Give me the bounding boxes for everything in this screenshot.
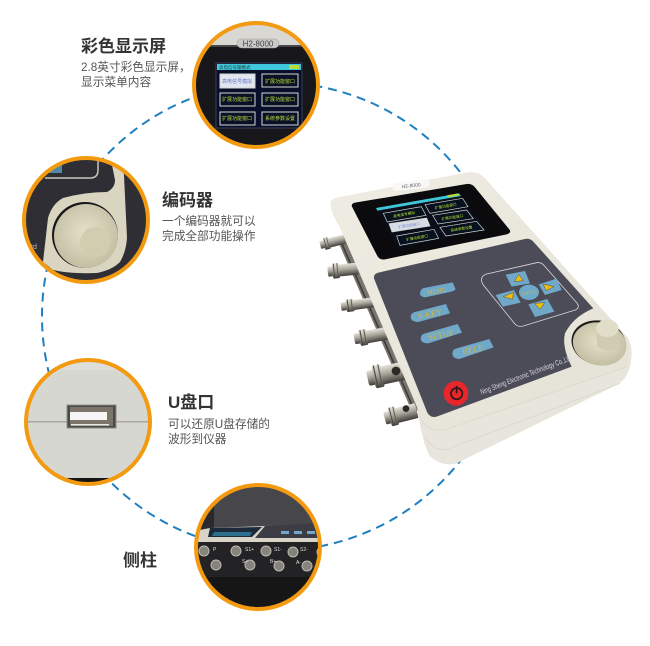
- rotary knob: [567, 315, 630, 370]
- brand text: Ning Sheng Electronic Technology Co.,Ltd: [479, 353, 572, 396]
- heading: USB port: U盘口: [168, 393, 214, 412]
- text: encoder description: 一个编码器就可以: [162, 215, 256, 228]
- photo circle: display: 高电信号模拟: [222, 78, 252, 85]
- device screen: [352, 184, 510, 260]
- heading: display: 彩色显示屏: [81, 37, 166, 56]
- button: S-KEY: S-KEY: [417, 307, 443, 321]
- arrow keys: ENTER: [522, 289, 536, 296]
- button: MENU: MENU: [427, 287, 447, 297]
- photo circle: display: 高电信号输模式: [219, 64, 251, 71]
- dashed connecting circle: [42, 82, 510, 550]
- photo circle: side panel: S2-: [300, 547, 308, 553]
- device screen: 扩展功能窗口: [406, 233, 429, 242]
- device screen: 高电信号模拟: [393, 210, 416, 219]
- text: USB description: 可以还原U盘存储的: [168, 418, 270, 431]
- text: display description: 显示菜单内容: [81, 76, 151, 89]
- device label plate: H2-8000: [401, 182, 421, 190]
- button: MENU: [420, 282, 456, 297]
- photo circle: side panel: S1+: [245, 547, 254, 553]
- device photo: [319, 172, 632, 464]
- device keypad panel: [374, 239, 593, 417]
- text: display description: 2.8英寸彩色显示屏，: [81, 61, 191, 74]
- photo circle: USB port: [24, 358, 152, 488]
- photo circle: side panel: B+: [270, 559, 276, 565]
- photo circle: display: 扩展功能窗口: [222, 96, 252, 103]
- photo circle: display: 扩展功能窗口: [265, 78, 295, 85]
- button: SETUP: SETUP: [427, 328, 454, 342]
- device screen: 扩展功能窗口: [434, 201, 457, 210]
- photo circle: side panel: P: [213, 547, 217, 553]
- USB socket: [67, 405, 116, 428]
- photo circle: display: 扩展功能窗口: [222, 115, 252, 122]
- device body: [330, 172, 632, 464]
- photo circle: display: 系统参数设置: [265, 115, 295, 122]
- device screen: 系统参数设置: [450, 224, 473, 233]
- text: USB description: 波形到仪器: [168, 433, 226, 446]
- button: SETUP: [421, 324, 462, 343]
- photo circle: encoder: [20, 155, 154, 287]
- photo circle: side panel: A-: [296, 560, 301, 566]
- text: USB description: [168, 418, 270, 446]
- photo circle: side panel: [194, 484, 327, 612]
- text: display description: [81, 60, 191, 89]
- device screen: 扩展功能窗口: [398, 221, 421, 229]
- device screen: 扩展功能窗口: [441, 213, 464, 221]
- arrow keys: [496, 271, 562, 317]
- photo circle: side panel: S+: [242, 559, 248, 565]
- heading: side panel: 侧柱: [123, 551, 157, 570]
- photo circle: display: [190, 20, 322, 150]
- button: HELP: HELP: [462, 343, 484, 356]
- photo circle: display: H2-8000: [243, 40, 274, 48]
- heading: encoder: 编码器: [162, 191, 213, 210]
- photo circle: side panel: S1-: [274, 547, 282, 553]
- button: S-KEY: [411, 304, 450, 322]
- device label plate: [392, 179, 430, 191]
- text: encoder description: [162, 214, 256, 243]
- photo circle: display: 扩展功能窗口: [265, 96, 295, 103]
- power button: [444, 381, 468, 406]
- device connectors: [319, 233, 419, 428]
- photo circle: encoder: td: [31, 244, 37, 251]
- text: encoder description: 完成全部功能操作: [162, 230, 256, 243]
- button: HELP: [452, 339, 494, 359]
